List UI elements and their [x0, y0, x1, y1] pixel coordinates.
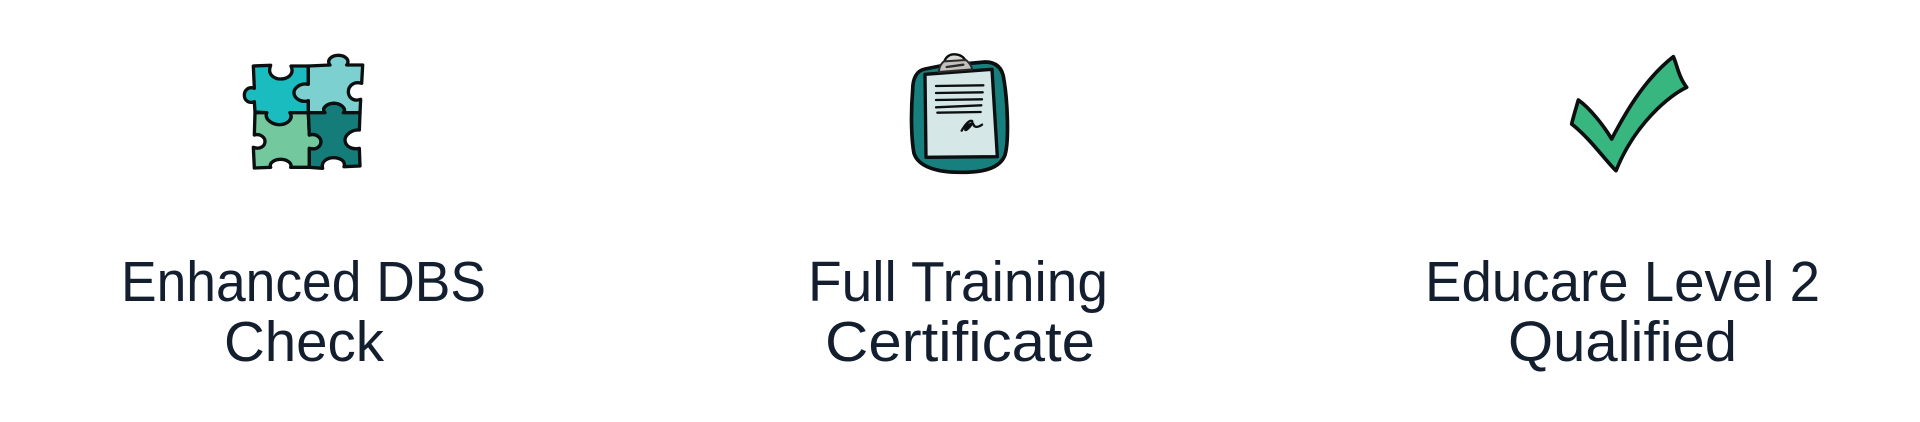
- heading: Full Training Certificate: Full Training: [808, 250, 1108, 314]
- panel: Full Training Certificate: [808, 54, 1108, 374]
- icon: puzzle pieces: [244, 55, 363, 168]
- signature: [962, 121, 982, 131]
- heading: Educare Level 2 Qualified: [1425, 250, 1820, 374]
- clipboard board: [912, 62, 1007, 172]
- icon: check mark: [1572, 57, 1687, 171]
- clip base: [939, 60, 972, 72]
- heading: Enhanced DBS Check: Check: [224, 310, 384, 374]
- panel: Enhanced DBS Check: [121, 55, 486, 374]
- heading: Enhanced DBS Check: [121, 250, 486, 374]
- panel: Educare Level 2 Qualified: [1425, 57, 1820, 374]
- puzzle piece: top left: [244, 65, 308, 125]
- puzzle piece: bottom left: [253, 113, 321, 168]
- heading: Educare Level 2 Qualified: Qualified: [1508, 310, 1737, 374]
- paper sheet: [925, 69, 997, 157]
- icon: clipboard: [912, 54, 1007, 172]
- clip slot: [947, 65, 963, 67]
- clip knob: [944, 54, 966, 62]
- heading: Educare Level 2 Qualified: Educare Level 2: [1425, 250, 1820, 314]
- puzzle piece: bottom right: [308, 103, 360, 168]
- heading: Enhanced DBS Check: Enhanced DBS: [121, 250, 486, 314]
- puzzle piece: top right: [294, 55, 363, 113]
- heading: Full Training Certificate: Certificate: [825, 310, 1095, 374]
- heading: Full Training Certificate: [808, 250, 1108, 374]
- text lines on paper: [936, 85, 983, 113]
